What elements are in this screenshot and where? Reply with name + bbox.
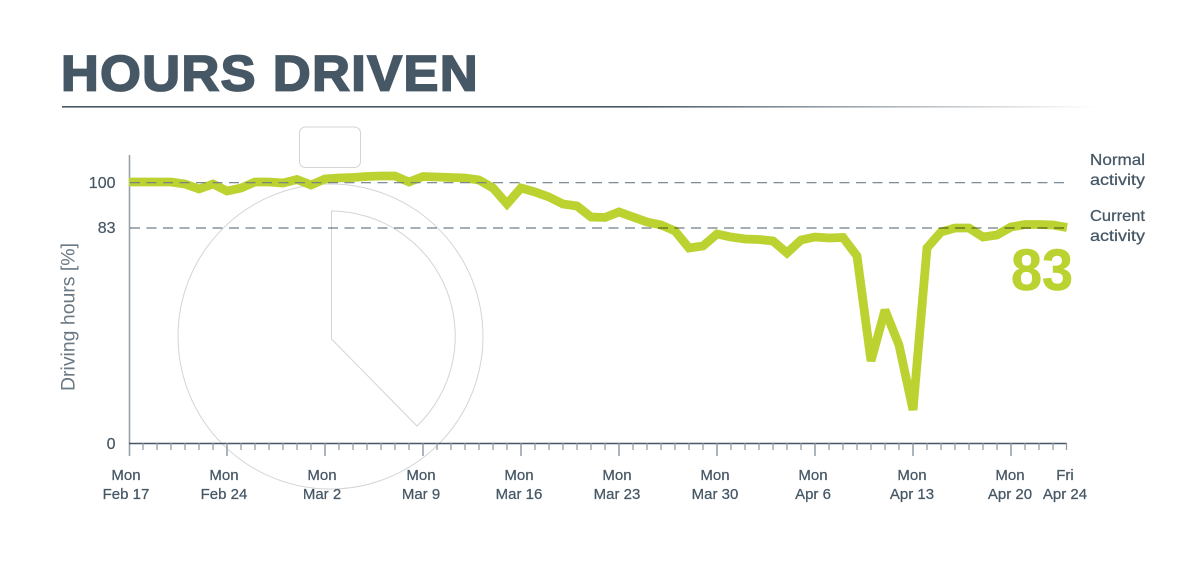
label: normal activity: activity: [1090, 172, 1145, 189]
x axis labels: Apr 24: [1043, 486, 1087, 503]
label: normal activity: [1090, 152, 1145, 189]
x axis labels: Mon: [504, 467, 534, 484]
x axis labels: Apr 13: [890, 486, 934, 503]
stopwatch outline: [178, 127, 483, 489]
driving hours line: [129, 176, 1067, 410]
current value: 83: [1011, 238, 1073, 303]
y axis labels: [89, 175, 116, 453]
x axis labels: Mon: [798, 467, 828, 484]
y axis title: Driving hours [%]: [58, 243, 80, 391]
x axis labels: Mon: [406, 467, 436, 484]
x axis labels: Mon: [700, 467, 730, 484]
title: HOURS DRIVEN: [61, 44, 479, 101]
x axis labels: Mar 23: [594, 486, 640, 503]
x axis labels: Feb 24: [201, 486, 247, 503]
y axis: [128, 155, 130, 456]
label: current activity: [1090, 208, 1146, 245]
x axis labels: Mon: [209, 467, 239, 484]
x axis labels: Mon: [307, 467, 337, 484]
y axis labels: 0: [107, 436, 116, 453]
x axis labels: Apr 6: [795, 486, 831, 503]
label: normal activity: Normal: [1090, 152, 1145, 169]
y axis labels: 83: [98, 220, 116, 237]
x axis labels: Mon: [111, 467, 141, 484]
reference line: normal activity: [130, 182, 1067, 184]
x axis with ticks: [129, 443, 1067, 456]
x axis labels: Mar 16: [496, 486, 542, 503]
x axis labels: Mon: [897, 467, 927, 484]
reference line: current activity: [130, 227, 1067, 229]
x axis labels: Mar 30: [692, 486, 738, 503]
y axis labels: 100: [89, 175, 116, 192]
x axis labels: Fri: [1056, 467, 1074, 484]
x axis labels: Feb 17: [103, 486, 149, 503]
x axis labels: Mar 2: [303, 486, 341, 503]
x axis labels: Mon: [602, 467, 632, 484]
label: current activity: Current: [1090, 208, 1146, 225]
x axis labels: Mon: [995, 467, 1025, 484]
x axis labels: Mar 9: [402, 486, 440, 503]
title rule: [62, 106, 1097, 108]
x axis labels: Apr 20: [988, 486, 1032, 503]
label: current activity: activity: [1090, 228, 1145, 245]
x axis labels: [103, 467, 1087, 503]
